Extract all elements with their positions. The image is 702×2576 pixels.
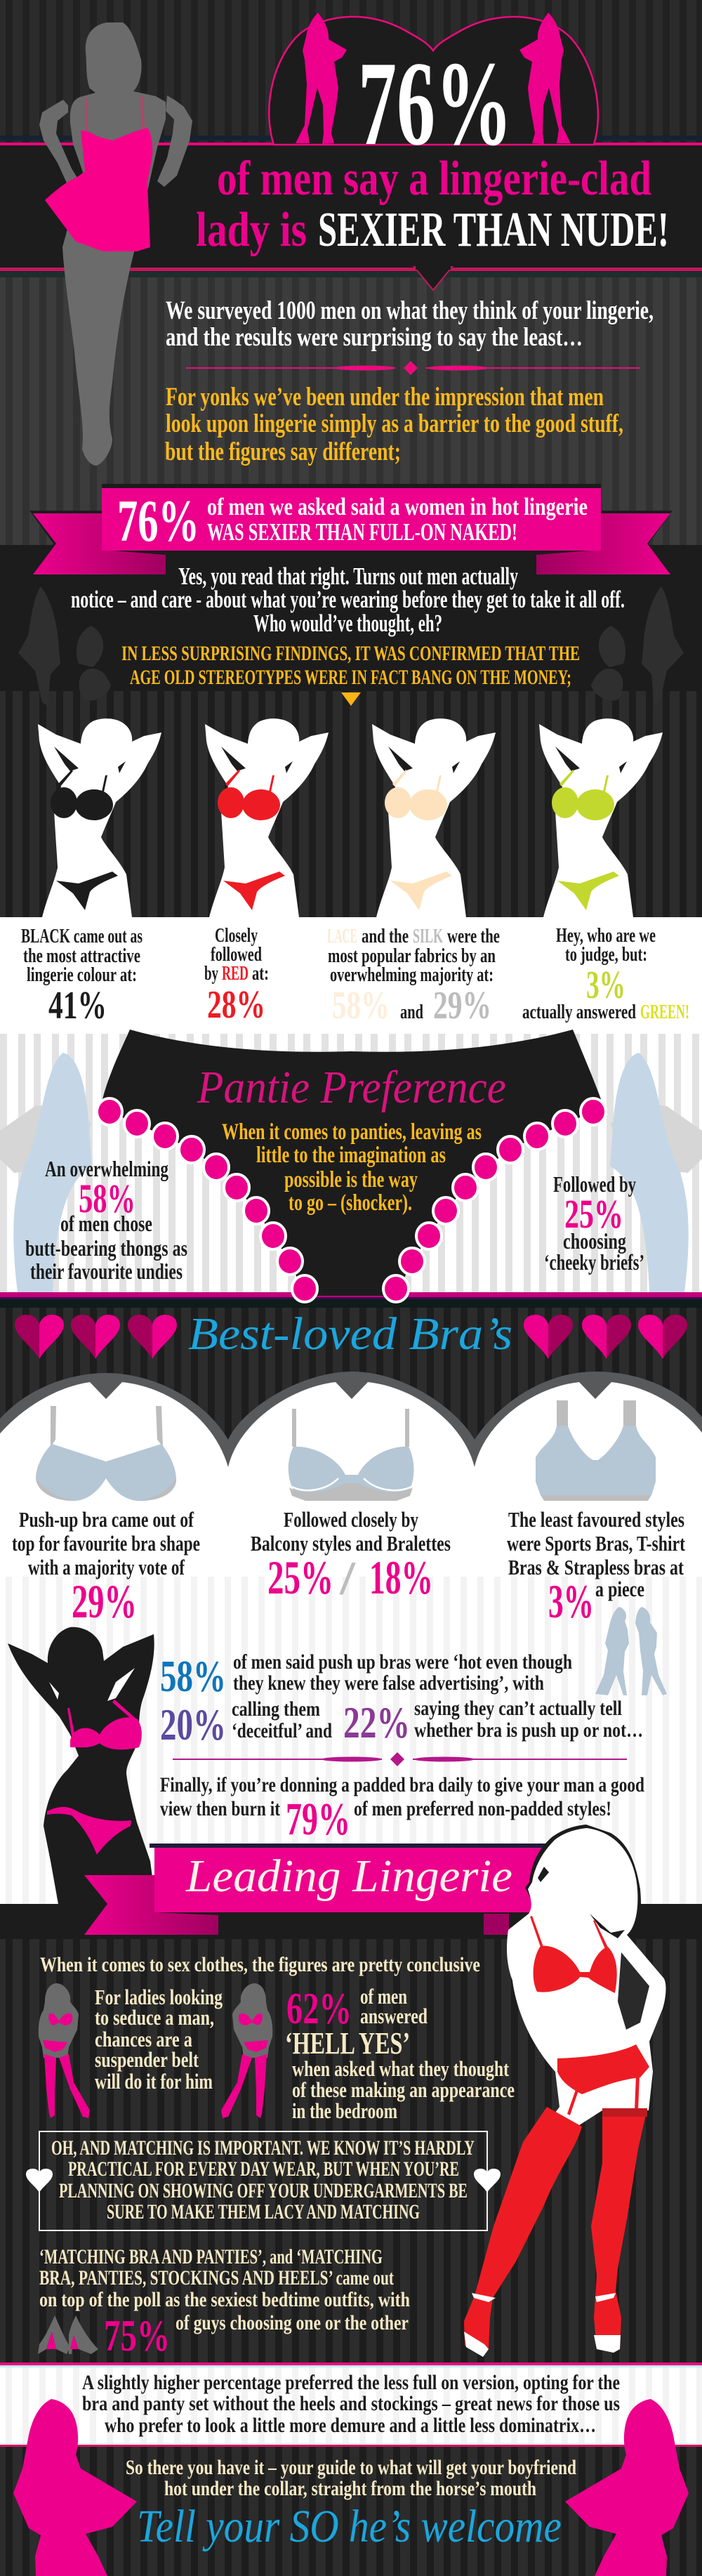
stat: 20% deceitful and 22% can't tell: whether bra is push up or not… bbox=[414, 1719, 643, 1742]
stat: lace and silk: SILK bbox=[413, 926, 443, 947]
stat: green 3%: actually answered bbox=[522, 1001, 636, 1023]
small suspender figure 1 bbox=[39, 1983, 90, 2118]
closing text bbox=[126, 2456, 576, 2500]
ornament divider bbox=[186, 361, 640, 375]
ribbon text: WAS SEXIER THAN FULL-ON NAKED! bbox=[207, 518, 517, 546]
stat: lace and silk: most popular fabrics by an bbox=[328, 945, 496, 967]
suspenders bbox=[567, 2075, 640, 2115]
stat: green 3% bbox=[522, 925, 689, 1023]
ribbon percentage: 76% bbox=[117, 488, 199, 554]
icon: push-up bra bbox=[36, 1406, 176, 1501]
stat: 58% thongs: 58% bbox=[79, 1176, 135, 1221]
suspender text bbox=[95, 1985, 223, 2094]
ribbon text bbox=[207, 493, 588, 546]
stat: red 28% bbox=[204, 925, 269, 1027]
heart outline behind headline bbox=[269, 17, 598, 145]
icon: heart left bbox=[26, 2169, 53, 2193]
ornament divider bbox=[173, 1752, 627, 1766]
stat: balcony 25% and bralettes 18%: 18% bbox=[369, 1551, 433, 1604]
stat: lace and silk: and the bbox=[362, 926, 409, 947]
arm gap bbox=[618, 1952, 649, 2030]
yes you read that right text bbox=[71, 563, 625, 637]
panties yellow text: little to the imagination as bbox=[256, 1143, 446, 1168]
stat: 25% cheeky briefs bbox=[544, 1171, 644, 1275]
callout text: PLANNING ON SHOWING OFF YOUR UNDERGARMENTS BE bbox=[59, 2179, 468, 2202]
stat: green 3%: 3% bbox=[586, 964, 625, 1007]
stat: black 41%: BLACK came out as bbox=[21, 926, 143, 947]
sex clothes intro text: When it comes to sex clothes, the figures are pretty conclusive bbox=[40, 1953, 480, 1976]
yes you read that right text: Yes, you read that right. Turns out men actually bbox=[178, 563, 518, 590]
stat: red 28%: at: bbox=[252, 963, 269, 985]
stat: push-up 29%: Push-up bra came out of bbox=[19, 1507, 194, 1532]
hearts left bbox=[15, 1315, 177, 1359]
stat: black 41%: lingerie colour at: bbox=[27, 964, 137, 986]
suspender text: to seduce a man, bbox=[95, 2005, 214, 2030]
stat: 20% deceitful and 22% can't tell: calling them bbox=[232, 1697, 320, 1721]
callout text bbox=[51, 2136, 475, 2223]
stat: push-up 29%: top for favourite bra shape bbox=[12, 1531, 200, 1556]
matching outfits text: of guys choosing one or the other bbox=[176, 2311, 409, 2334]
icon: grey woman in pink dress bbox=[39, 22, 192, 466]
panties yellow text bbox=[222, 1119, 482, 1216]
right stocking bbox=[591, 2108, 647, 2349]
stat: 20% deceitful and 22% can't tell: ‘deceitful’ and bbox=[232, 1719, 332, 1742]
stat: 58% thongs: their favourite undies bbox=[30, 1259, 183, 1284]
matching outfits text: ‘MATCHING BRA AND PANTIES’, and ‘MATCHING bbox=[39, 2245, 383, 2268]
panties yellow text: When it comes to panties, leaving as bbox=[222, 1119, 482, 1145]
shoes bbox=[464, 2293, 621, 2357]
stat: 75%: 75% bbox=[104, 2311, 170, 2360]
ribbon front bbox=[150, 1844, 564, 1848]
less full on text bbox=[82, 2371, 620, 2437]
faint silhouettes in dark band bbox=[18, 586, 684, 706]
pink silhouette bottom left bbox=[13, 2399, 137, 2576]
stat: red 28%: 28% bbox=[207, 983, 265, 1027]
stat: balcony 25% and bralettes 18%: Balcony styles and Bralettes bbox=[251, 1531, 451, 1556]
suspender text: will do it for him bbox=[95, 2069, 213, 2094]
header band lines bbox=[0, 136, 702, 277]
stat: red 28%: followed bbox=[211, 944, 262, 966]
stat: green 3%: to judge, but: bbox=[565, 944, 647, 966]
stat: black 41%: the most attractive bbox=[23, 945, 140, 967]
stat: red 28%: RED bbox=[222, 963, 249, 985]
stat: 62% hell yes: in the bedroom bbox=[292, 2098, 397, 2123]
stat: lace and silk: 29% bbox=[433, 984, 491, 1027]
red bra bbox=[530, 1916, 608, 1949]
stat: red 28%: Closely bbox=[215, 925, 258, 947]
stat: 62% hell yes: of men bbox=[360, 1984, 407, 2009]
suspender text: suspender belt bbox=[95, 2047, 199, 2072]
stat: 58% false advertising: of men said push up bras were ‘hot even though bbox=[233, 1650, 572, 1674]
stat: balcony 25% and bralettes 18%: Followed closely by bbox=[284, 1507, 418, 1532]
matching callout box bbox=[26, 2131, 501, 2230]
middle striped background bbox=[0, 277, 702, 545]
icon: two small blue women bbox=[595, 1607, 667, 1695]
stat: 25% cheeky briefs: choosing bbox=[563, 1228, 626, 1254]
closing text: hot under the collar, straight from the horse’s mouth bbox=[164, 2477, 536, 2500]
stat: 62% hell yes: when asked what they thought bbox=[292, 2056, 510, 2081]
ribbon right tail bbox=[484, 1914, 509, 1935]
stat: 58% thongs bbox=[25, 1156, 187, 1284]
pink silhouette bottom right bbox=[565, 2399, 689, 2576]
panties yellow text: possible is the way bbox=[284, 1167, 418, 1192]
stat: 58% false advertising: they knew they were false advertising’, with bbox=[233, 1671, 544, 1695]
stat: 25% cheeky briefs: 25% bbox=[564, 1191, 623, 1237]
suspender text: For ladies looking bbox=[95, 1985, 223, 2009]
icon: sports bra bbox=[536, 1400, 656, 1501]
stat: 20% deceitful and 22% can't tell: 22% bbox=[343, 1697, 410, 1747]
panties bead trim bbox=[97, 1098, 606, 1302]
headline line 2 bbox=[196, 203, 669, 257]
stat: balcony 25% and bralettes 18%: / bbox=[339, 1551, 356, 1605]
hair detail bbox=[538, 1867, 625, 1938]
ribbon: Leading Lingerie bbox=[84, 1844, 564, 1935]
headline 76%: 76% bbox=[358, 37, 512, 171]
callout text: SURE TO MAKE THEM LACY AND MATCHING bbox=[107, 2200, 420, 2223]
stat: 62% hell yes: ‘HELL YES’ bbox=[285, 2026, 410, 2061]
icon: balcony bra bbox=[289, 1409, 414, 1501]
closing text: So there you have it – your guide to what will get your boyfriend bbox=[126, 2456, 576, 2479]
stat: 20% deceitful and 22% can't tell bbox=[160, 1697, 643, 1749]
white woman in red lingerie bbox=[464, 1825, 665, 2357]
lingerie colours striped background bbox=[0, 691, 702, 917]
blue silhouette right bbox=[610, 1053, 702, 1292]
yellow intro text: but the figures say different; bbox=[165, 438, 401, 466]
callout text: PRACTICAL FOR EVERY DAY WEAR, BUT WHEN YOU’RE bbox=[68, 2157, 459, 2181]
panties yellow text: to go – (shocker). bbox=[289, 1190, 412, 1216]
icon: pink silhouette right bbox=[519, 13, 571, 144]
padded bra text: of men preferred non-padded styles! bbox=[354, 1797, 611, 1820]
padded bra text: 79% bbox=[286, 1794, 350, 1845]
ribbon left tail bbox=[84, 1875, 218, 1935]
stat: 58% thongs: butt-bearing thongs as bbox=[25, 1235, 187, 1261]
band under panties bbox=[0, 1292, 702, 1308]
leading lingerie striped background bbox=[0, 1939, 702, 2363]
dark leading lingerie background bbox=[0, 1904, 702, 1940]
body bbox=[507, 1828, 665, 2145]
stat: lace and silk: LACE bbox=[327, 926, 357, 947]
closing striped background bbox=[0, 2446, 702, 2576]
stat: 62% hell yes: answered bbox=[360, 2004, 428, 2028]
matching outfits text bbox=[39, 2245, 410, 2334]
hearts right bbox=[524, 1315, 687, 1359]
pink dress bbox=[45, 128, 152, 251]
headline line 2: lady is bbox=[196, 203, 307, 257]
heading: Best-loved Bra's: Best-loved Bra’s bbox=[188, 1308, 512, 1360]
grey arches bbox=[0, 1372, 702, 1510]
dark best-loved bras background bbox=[0, 1294, 702, 1504]
matching outfits text: BRA, PANTIES, STOCKINGS AND HEELS’ came out bbox=[39, 2266, 394, 2289]
yellow intro text bbox=[165, 383, 623, 466]
stat: lace and silk: 58% bbox=[332, 984, 390, 1027]
stat: 58% false advertising bbox=[160, 1650, 572, 1701]
stat: black 41% bbox=[21, 926, 143, 1027]
padded bra text bbox=[160, 1773, 644, 1845]
heading: Leading Lingerie: Leading Lingerie bbox=[185, 1851, 512, 1902]
small suspender figure 2 bbox=[221, 1983, 272, 2118]
stat: 62% hell yes: 62% bbox=[286, 1983, 352, 2033]
stat: lace and silk: overwhelming majority at: bbox=[330, 964, 494, 986]
pink panties bbox=[47, 1807, 131, 1855]
hair outline bbox=[525, 1825, 641, 1940]
stat: lace and silk: and bbox=[400, 1001, 423, 1023]
pink bra bbox=[67, 1700, 138, 1740]
stat: lace and silk: were the bbox=[447, 926, 500, 947]
stat: 20% deceitful and 22% can't tell: saying they can’t actually tell bbox=[414, 1697, 622, 1720]
stat: 58% thongs: of men chose bbox=[60, 1211, 152, 1236]
top striped background bbox=[0, 0, 702, 143]
stat: 58% false advertising: 58% bbox=[160, 1651, 226, 1701]
ribbon: 76% sexier than naked bbox=[29, 484, 673, 577]
dark band behind intro text bbox=[0, 545, 702, 691]
white closing band bbox=[0, 2363, 702, 2447]
stat: 25% cheeky briefs: Followed by bbox=[553, 1171, 636, 1197]
stat: lace and silk bbox=[327, 926, 500, 1027]
white arch panels bbox=[0, 1382, 702, 1577]
callout text: OH, AND MATCHING IS IMPORTANT. WE KNOW IT’S HARDLY bbox=[51, 2136, 475, 2160]
black woman with pink lingerie bbox=[8, 1627, 156, 1904]
stat: 25% cheeky briefs: ‘cheeky briefs’ bbox=[544, 1249, 644, 1275]
yellow capitals text bbox=[121, 642, 580, 689]
stat: push-up 29%: with a majority vote of bbox=[28, 1555, 185, 1579]
white results background bbox=[0, 917, 702, 1037]
stat: 62% hell yes: of these making an appearance bbox=[292, 2077, 515, 2102]
figure: black lingerie bbox=[38, 718, 161, 917]
stat: balcony 25% and bralettes 18% bbox=[251, 1507, 451, 1605]
figure: green lingerie bbox=[539, 718, 663, 917]
stat: 58% thongs: An overwhelming bbox=[45, 1156, 168, 1181]
suspender text: chances are a bbox=[95, 2027, 192, 2051]
closing script line: Tell your SO he’s welcome bbox=[137, 2501, 562, 2552]
left stocking bbox=[464, 2107, 582, 2357]
yellow arrow bbox=[341, 692, 361, 706]
stat: least favoured 3% bbox=[507, 1507, 686, 1628]
heading: Pantie Preference: Pantie Preference bbox=[197, 1062, 506, 1113]
header dark band bbox=[0, 143, 702, 268]
red panties bbox=[557, 2044, 649, 2094]
stat: least favoured 3%: 3% bbox=[548, 1575, 594, 1628]
matching outfits text: on top of the poll as the sexiest bedtime outfits, with bbox=[39, 2288, 410, 2311]
stat: push-up 29% bbox=[12, 1507, 200, 1628]
stat: 62% hell yes bbox=[285, 1983, 515, 2123]
arrow notch below header band bbox=[414, 267, 452, 290]
stat: balcony 25% and bralettes 18%: 25% bbox=[267, 1551, 333, 1604]
stat: push-up 29%: 29% bbox=[72, 1575, 137, 1628]
light striped panties background bbox=[0, 1034, 702, 1294]
ribbon tails bbox=[29, 511, 166, 577]
stat: least favoured 3%: a piece bbox=[595, 1577, 644, 1601]
panties shape bbox=[97, 1030, 606, 1302]
stat: green 3%: Hey, who are we bbox=[556, 925, 656, 947]
figure: lace lingerie bbox=[372, 718, 496, 917]
icon: heart right bbox=[474, 2169, 501, 2193]
blue silhouette left bbox=[0, 1053, 92, 1292]
ribbon front bbox=[102, 484, 601, 489]
stat: 20% deceitful and 22% can't tell: 20% bbox=[160, 1700, 226, 1749]
figure: red lingerie bbox=[205, 718, 329, 917]
light striped bras background bbox=[0, 1573, 702, 1904]
icon: heels bbox=[38, 2315, 98, 2354]
intro text: and the results were surprising to say the least… bbox=[166, 323, 583, 352]
yes you read that right text: Who would’ve thought, eh? bbox=[253, 610, 442, 637]
stat: red 28%: by bbox=[204, 963, 218, 985]
padded bra text: view then burn it bbox=[160, 1797, 280, 1820]
intro text bbox=[166, 296, 654, 352]
ribbon text: of men we asked said a women in hot lingerie bbox=[207, 493, 588, 520]
stat: black 41%: 41% bbox=[48, 984, 107, 1027]
icon: pink silhouette left bbox=[296, 13, 347, 144]
